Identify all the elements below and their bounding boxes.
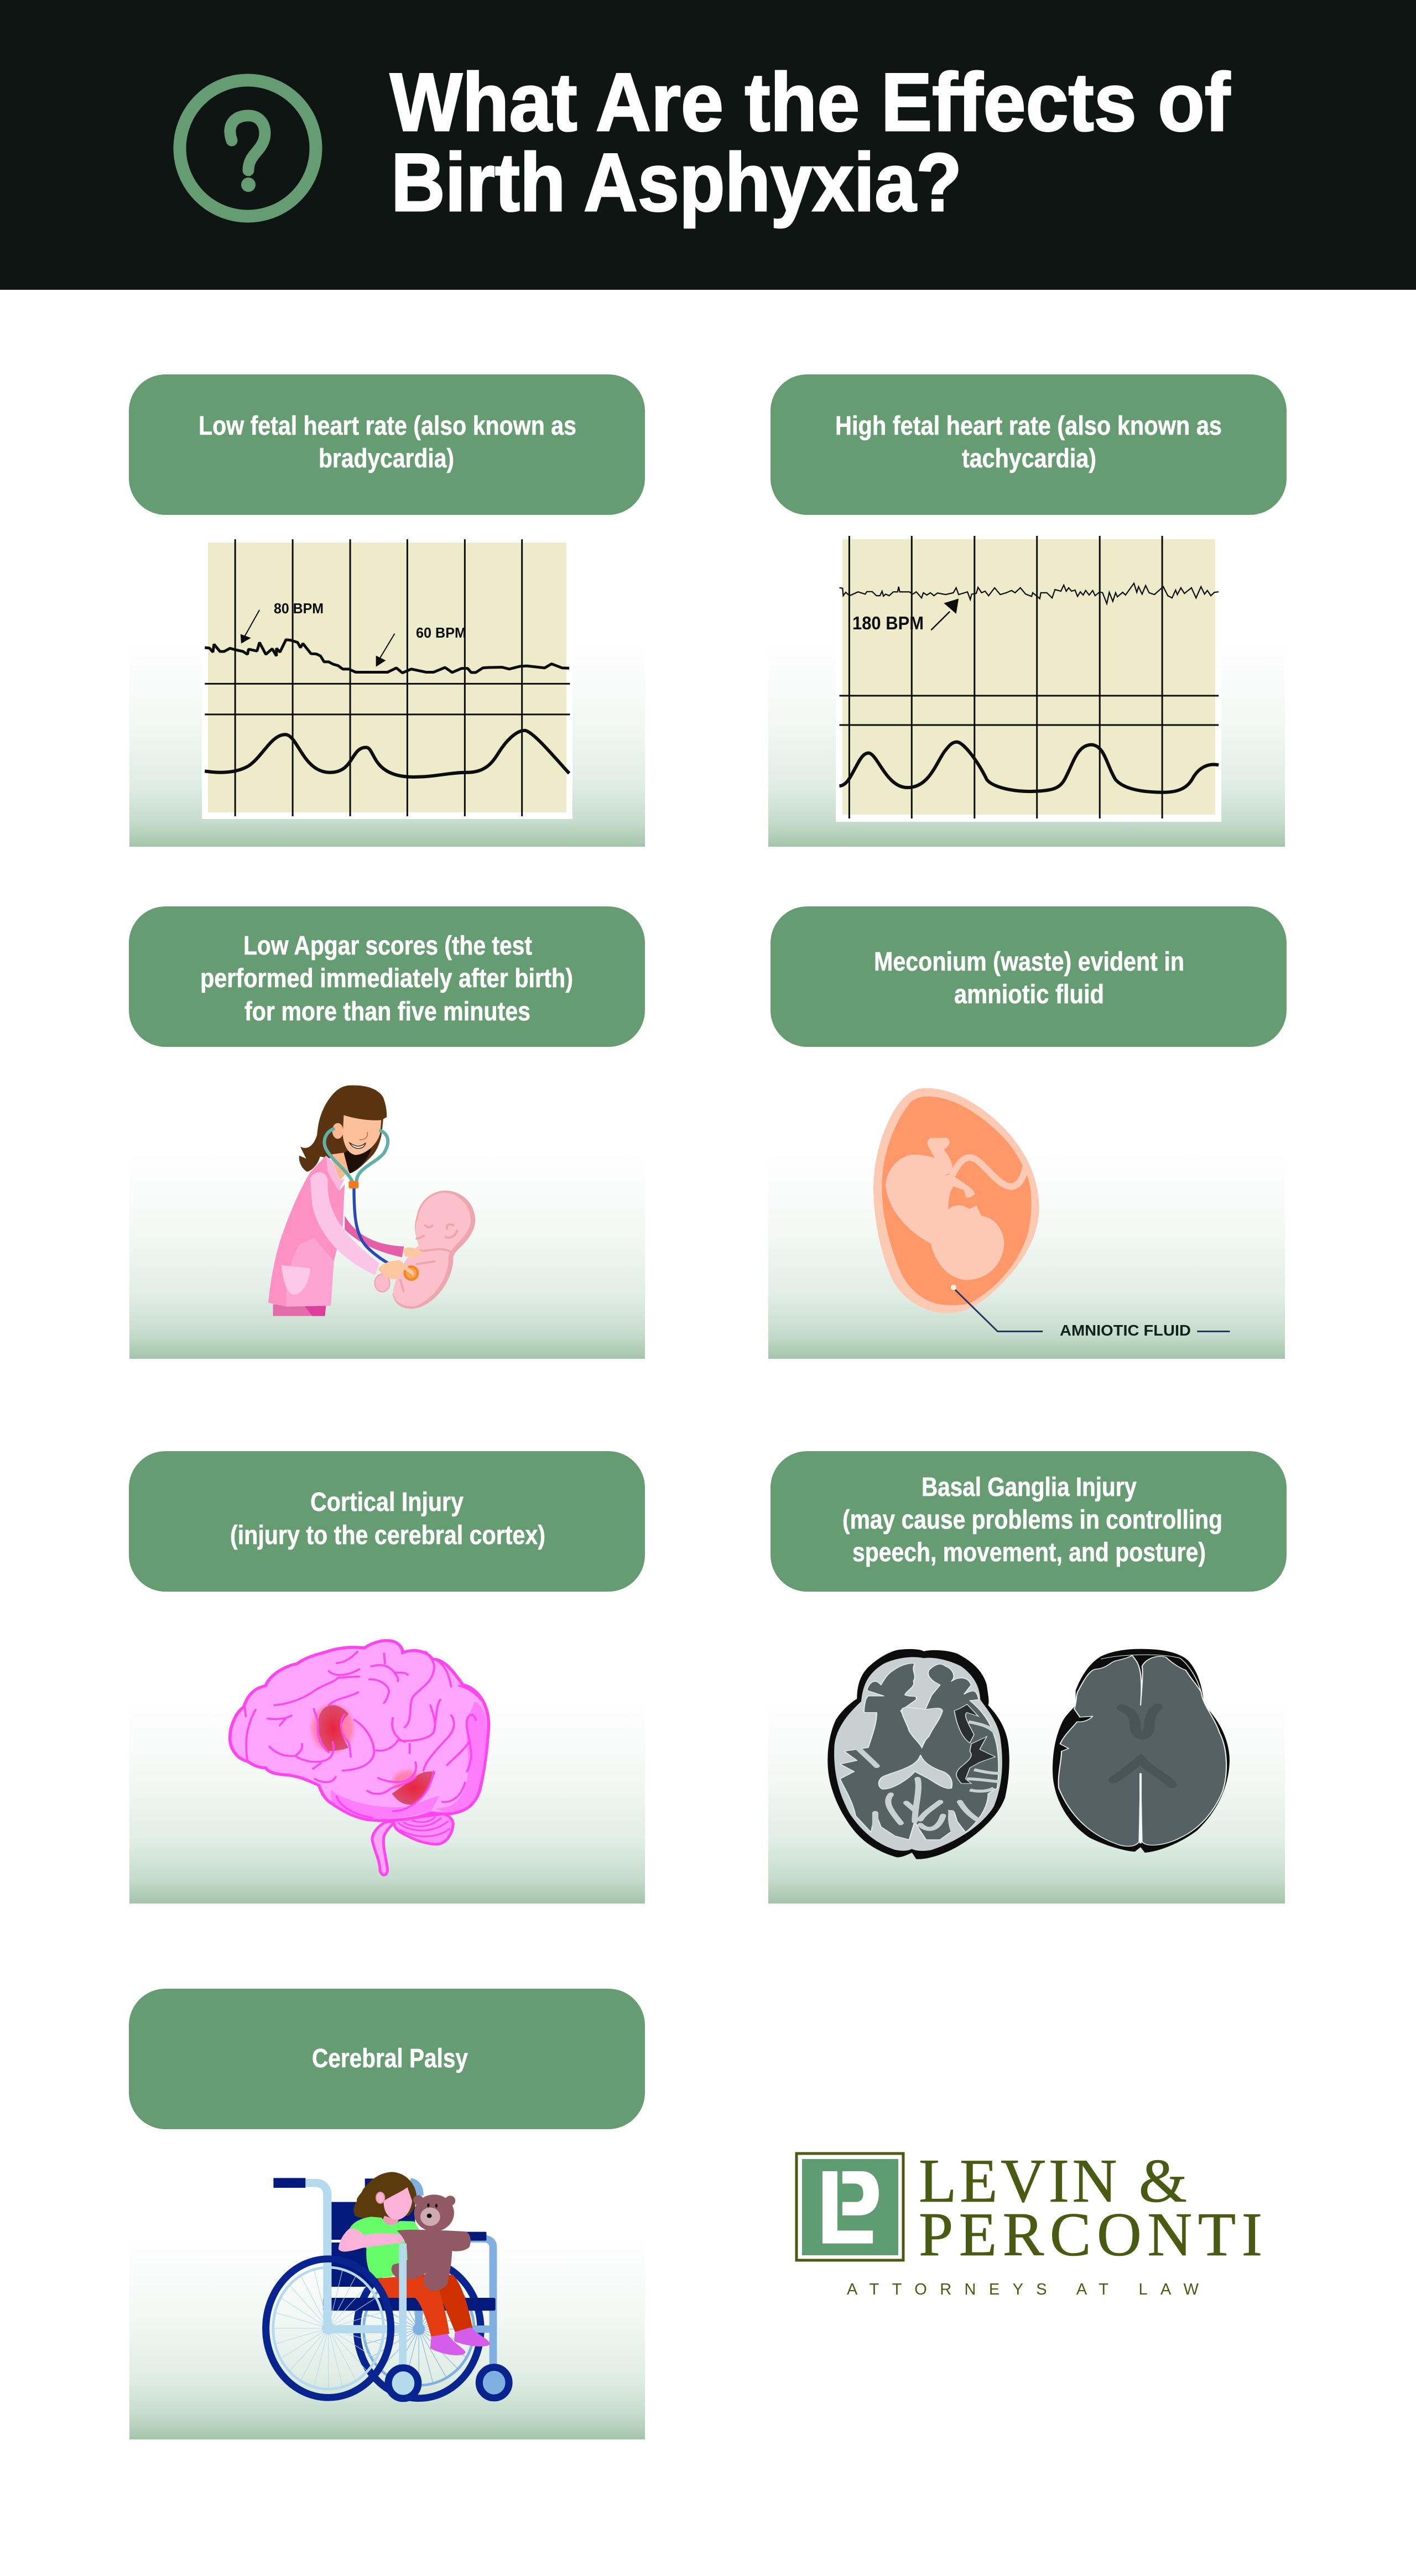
heading pill: basal ganglia injury: speech, movement, and posture)	[852, 1538, 1206, 1567]
shirt	[349, 2217, 420, 2278]
title	[390, 56, 1230, 228]
near sleeve	[310, 1172, 379, 1275]
casters	[388, 2368, 418, 2398]
injury spot 1	[318, 1705, 348, 1751]
sulci	[244, 1652, 481, 1818]
hair	[299, 1086, 387, 1174]
heading pill: cortical injury	[129, 1451, 645, 1592]
heading pill: low Apgar scores: Low Apgar scores (the test	[243, 931, 532, 961]
chart: bradycardia fetal monitor strip	[202, 536, 572, 819]
logo wordmark: ATTORNEYS AT LAW	[847, 2281, 1199, 2298]
scan: healthy brain	[827, 1649, 1009, 1859]
heading pill: low fetal heart rate	[129, 374, 645, 515]
scan: injured brain	[1053, 1649, 1230, 1853]
heading pill: high fetal heart rate	[771, 374, 1287, 515]
title: What Are the Effects of	[390, 56, 1230, 148]
front frame	[305, 2183, 400, 2329]
injury spot 2	[392, 1771, 435, 1805]
heading pill: meconium	[771, 906, 1287, 1047]
brain stem	[372, 1821, 394, 1875]
seat	[323, 2298, 496, 2311]
chart: bradycardia fetal monitor strip: 80 BPM	[274, 600, 324, 617]
coat	[268, 1156, 345, 1307]
logo mark	[796, 2153, 903, 2260]
hair	[353, 2172, 417, 2219]
illustration: child with teddy bear in wheelchair	[266, 2172, 509, 2398]
panel: low fetal heart rate	[129, 374, 645, 847]
far arm	[345, 1216, 404, 1258]
baby	[393, 1191, 475, 1309]
heading pill: cortical injury: Cortical Injury	[310, 1488, 464, 1517]
panel: low Apgar scores	[129, 906, 645, 1359]
heading pill: cerebral palsy	[129, 1989, 645, 2129]
heading pill: meconium: Meconium (waste) evident in	[874, 947, 1184, 977]
pocket	[282, 1265, 310, 1295]
rear frame	[413, 2323, 425, 2335]
panel: cerebral palsy	[129, 1989, 645, 2439]
heading pill: high fetal heart rate: High fetal heart rate (also known as	[835, 411, 1222, 441]
trousers	[419, 2275, 472, 2332]
trousers	[273, 1305, 326, 1316]
heading pill: high fetal heart rate: tachycardia)	[962, 444, 1096, 473]
heading pill: basal ganglia injury: Basal Ganglia Injury	[922, 1473, 1137, 1502]
logo wordmark: LEVIN &	[919, 2147, 1187, 2215]
face	[343, 1115, 381, 1155]
panel: high fetal heart rate	[768, 374, 1287, 847]
heading pill: low Apgar scores: for more than five minutes	[244, 997, 530, 1026]
heading pill: basal ganglia injury: (may cause problems in controlling	[842, 1505, 1222, 1535]
heading pill: cerebral palsy: Cerebral Palsy	[312, 2044, 468, 2073]
cerebrum	[230, 1641, 489, 1821]
heading pill: low fetal heart rate: Low fetal heart rate (also known as	[199, 411, 576, 441]
heading pill: low Apgar scores	[129, 906, 645, 1047]
illustration: brain with injury spots	[230, 1641, 489, 1875]
chart: bradycardia fetal monitor strip: 60 BPM	[416, 624, 466, 641]
title: Birth Asphyxia?	[391, 136, 962, 228]
chart: tachycardia fetal monitor strip	[836, 534, 1221, 822]
panel: basal ganglia injury	[768, 1451, 1287, 1904]
logo wordmark	[847, 2147, 1262, 2298]
socks	[454, 2327, 490, 2346]
chart: tachycardia fetal monitor strip: 180 BPM	[852, 613, 924, 633]
shaded lobes	[435, 1702, 487, 1812]
logo wordmark: PERCONTI	[919, 2200, 1262, 2269]
heading pill: low Apgar scores: performed immediately after birth)	[200, 964, 573, 993]
heading pill: meconium: amniotic fluid	[954, 980, 1104, 1009]
heading pill: basal ganglia injury	[771, 1451, 1287, 1592]
header band	[0, 0, 1416, 290]
illustration: brain scans	[827, 1649, 1230, 1859]
panel: meconium	[768, 906, 1287, 1359]
chest piece	[404, 1265, 419, 1281]
hands	[378, 1260, 414, 1279]
heading pill: cortical injury: (injury to the cerebral cortex)	[230, 1521, 545, 1550]
backrest	[331, 2202, 415, 2240]
stethoscope	[324, 1129, 388, 1182]
arm	[339, 2229, 407, 2251]
injury glow	[312, 1704, 353, 1752]
logo: Levin & Perconti	[796, 2147, 1262, 2298]
neck and face	[383, 2216, 399, 2225]
neck	[330, 1153, 348, 1180]
heading pill: low fetal heart rate: bradycardia)	[319, 444, 454, 473]
panel: cortical injury	[129, 1451, 645, 1904]
bear	[392, 2194, 471, 2291]
illustration: fetus in amniotic sac	[873, 1088, 1230, 1331]
illustration: doctor examining newborn	[268, 1086, 475, 1316]
front wheel	[266, 2259, 391, 2397]
cerebellum	[394, 1814, 453, 1844]
rear wheel	[357, 2260, 481, 2398]
darkened region	[954, 1704, 995, 1784]
icon: question mark in circle	[180, 80, 316, 216]
label: amniotic fluid: AMNIOTIC FLUID	[1060, 1322, 1191, 1339]
